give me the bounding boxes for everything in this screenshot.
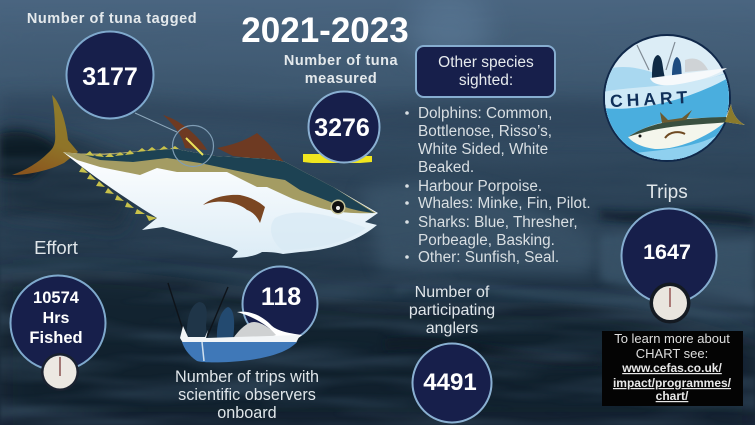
list: other species sighted: Harbour Porpoise. xyxy=(418,178,542,195)
heading: number of tuna tagged: Number of tuna tagged xyxy=(27,11,197,27)
list: other species sighted: Whales: Minke, Fin, Pilot. xyxy=(418,195,591,212)
stat circle: observer trips: 118 xyxy=(261,283,301,311)
stat circle: hours fished: Hrs xyxy=(43,310,69,327)
tail fin xyxy=(12,95,78,175)
logo: CHART roundel: CHART xyxy=(610,87,692,111)
panel: learn more box: www.cefas.co.uk/ xyxy=(621,361,722,375)
icon: stopwatch trips xyxy=(650,282,690,324)
belly shade xyxy=(271,213,366,250)
text: number of participating anglers: anglers xyxy=(426,320,478,337)
dorsal finlets xyxy=(85,146,179,157)
stat circle: hours fished xyxy=(10,276,106,370)
stat circle: tuna measured: 3276 xyxy=(314,114,370,142)
stat circle: tuna tagged: 3177 xyxy=(82,63,138,91)
icon: stopwatch effort xyxy=(41,353,79,391)
illustration: yellowfin tuna xyxy=(12,95,378,258)
stat circle: tuna tagged xyxy=(66,32,154,118)
heading: number of tuna measured: measured xyxy=(305,71,377,87)
text: number of participating anglers: Number of xyxy=(415,284,489,301)
dorsal fins xyxy=(163,115,207,150)
panel: learn more box: CHART see: xyxy=(636,346,708,361)
icon: fishing boat xyxy=(168,283,302,362)
list: other species sighted: Dolphins: Common, xyxy=(418,105,552,122)
list: other species sighted: Beaked. xyxy=(418,159,474,176)
panel: learn more box: To learn more about xyxy=(614,331,730,346)
heading: trips: Trips xyxy=(646,182,688,203)
text: trips with scientific observers: scientific observers xyxy=(178,386,316,404)
khaki band xyxy=(63,149,376,213)
stat circle: trips xyxy=(622,208,716,304)
tag callout: pointer line and magnifier with tag xyxy=(135,113,214,166)
dark back xyxy=(85,149,374,213)
title: 2021-2023 xyxy=(241,11,409,50)
stat circle: hours fished: 10574 xyxy=(33,289,80,307)
ventral finlets xyxy=(79,167,157,221)
panel: learn more box xyxy=(602,331,743,406)
panel: learn more box: chart/ xyxy=(656,389,689,403)
stat circle: anglers: 4491 xyxy=(423,369,477,396)
stat circle: tuna measured xyxy=(308,92,380,162)
tuna body xyxy=(63,149,378,258)
logo: CHART roundel xyxy=(603,34,745,162)
stat circle: trips: 1647 xyxy=(643,240,691,264)
list: other species sighted: Bottlenose, Risso’s, xyxy=(418,123,552,140)
heading: number of tuna measured: Number of tuna xyxy=(284,53,398,69)
list: other species sighted: Other: Sunfish, Seal. xyxy=(418,249,559,266)
stat circle: anglers xyxy=(412,344,492,422)
text: trips with scientific observers: onboard xyxy=(217,404,277,422)
icon: yellow measuring tape xyxy=(303,154,372,163)
pectoral fin xyxy=(203,195,265,223)
heading: effort: Effort xyxy=(34,237,78,258)
eye xyxy=(330,200,346,214)
stat circle: observer trips xyxy=(242,266,318,342)
text: trips with scientific observers: Number of trips with xyxy=(175,368,319,386)
panel: other species heading: Other species xyxy=(438,54,534,71)
panel: other species heading xyxy=(416,46,555,97)
list: other species sighted xyxy=(405,105,591,266)
stat circle: hours fished: Fished xyxy=(29,329,83,347)
list: other species sighted: Sharks: Blue, Thresher, xyxy=(418,214,578,231)
panel: other species heading: sighted: xyxy=(459,72,513,89)
text: number of participating anglers: participating xyxy=(409,302,495,319)
panel: learn more box: impact/programmes/ xyxy=(613,376,732,390)
list: other species sighted: White Sided, White xyxy=(418,141,548,158)
list: other species sighted: Porbeagle, Basking. xyxy=(418,232,555,249)
